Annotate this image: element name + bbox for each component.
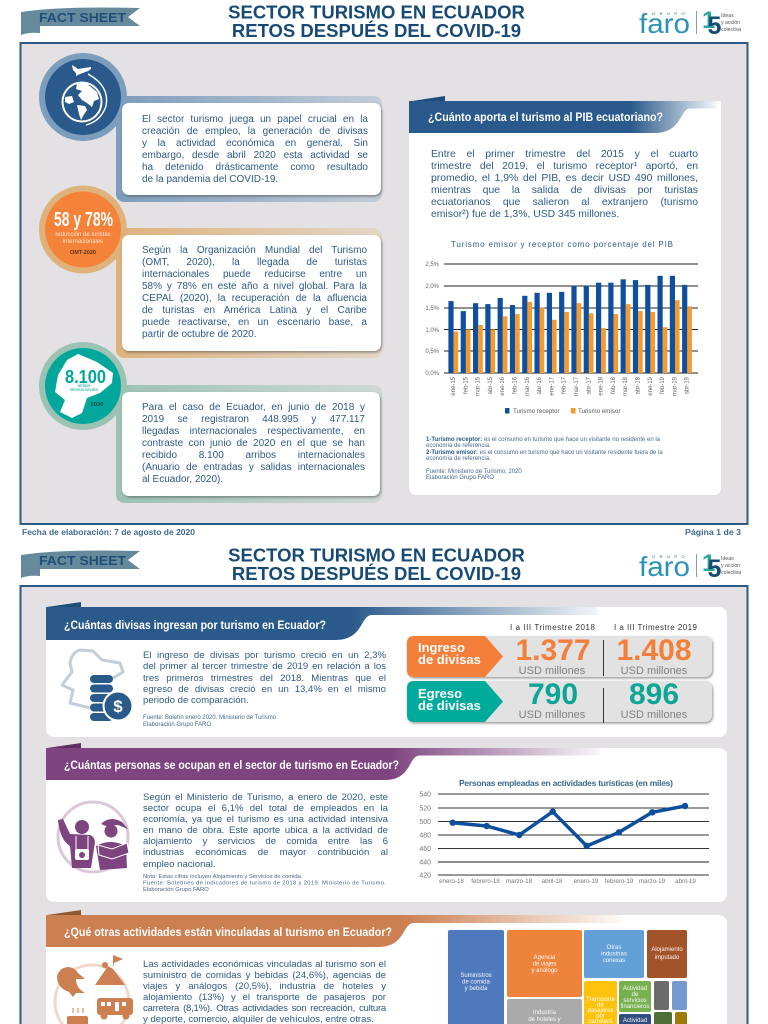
card background bbox=[409, 101, 721, 495]
logo: grupo faro: y acción bbox=[721, 20, 740, 26]
treemap: linked activities: servicios bbox=[623, 998, 647, 1004]
bar chart: tourism share of GDP: 1,5% bbox=[425, 306, 440, 312]
bar chart: tourism share of GDP: 1,0% bbox=[425, 328, 440, 334]
treemap: linked activities: Agencia bbox=[534, 955, 556, 961]
heading: currency: ¿Cuántas divisas ingresan por turismo en Ecuador? bbox=[64, 618, 326, 632]
line chart: employment: marzo-18 bbox=[506, 878, 533, 885]
bar chart: tourism share of GDP: ene-16 bbox=[500, 376, 506, 396]
column headers bbox=[510, 623, 698, 632]
panel: page 2 background bbox=[20, 586, 748, 1024]
bar chart: tourism share of GDP: 0,0% bbox=[425, 371, 440, 377]
line chart: employment: 480 bbox=[419, 832, 431, 840]
band: blue connector bbox=[116, 96, 382, 202]
panel: linked activities bbox=[46, 910, 727, 1024]
bar chart: tourism share of GDP: feb-16 bbox=[512, 376, 518, 394]
badge: 58 y 78%: internacionales bbox=[63, 239, 103, 245]
text: currency: periodo de comparación. bbox=[143, 695, 249, 706]
logo: grupo faro: GRUPO bbox=[652, 554, 689, 559]
treemap: linked activities: por bbox=[596, 1014, 605, 1020]
text: overview: creación de empleo, la generación de divisas bbox=[142, 126, 368, 137]
notes: definitions and source: economía de referencia. bbox=[426, 443, 491, 449]
section: third item, Ecuador arrivals bbox=[39, 342, 382, 503]
logo: grupo faro bbox=[639, 550, 741, 583]
text: GDP intro: Entre el primer trimestre del 2015 y el cuarto bbox=[431, 149, 698, 160]
treemap: linked activities: Industria bbox=[533, 1010, 557, 1016]
text: global reduction: puede reactivarse, en un escenario base, a bbox=[142, 317, 367, 328]
line chart: employment: abril-19 bbox=[675, 878, 696, 885]
section: first item, sector overview bbox=[39, 53, 382, 202]
footer: page number: Página 1 de 3 bbox=[685, 528, 742, 537]
bar chart: tourism share of GDP: abr-15 bbox=[488, 376, 494, 394]
heading: employment: ¿Cuántas personas se ocupan en el sector de turismo en Ecuador? bbox=[64, 758, 399, 772]
notes: definitions and source bbox=[426, 437, 663, 481]
text: global reduction: (OMT, 2020), la llegada de turistas bbox=[142, 257, 367, 268]
text: currency: egreso de divisas creció en un 13,4% en el mismo bbox=[143, 684, 386, 695]
title: SECTOR TURISMO EN ECUADOR bbox=[228, 2, 525, 22]
stat row: egreso de divisas bbox=[407, 678, 712, 723]
stat row: ingreso de divisas: Ingreso bbox=[418, 640, 465, 655]
line chart: employment: 440 bbox=[419, 860, 431, 866]
stat row: ingreso de divisas: de divisas bbox=[418, 652, 481, 667]
bar chart: tourism share of GDP: 2,0% bbox=[425, 284, 440, 290]
text: employment: sector ocupa el 6,1% del total de empleados en la bbox=[143, 803, 388, 814]
text: currency bbox=[143, 650, 386, 710]
title bbox=[228, 2, 525, 41]
badge: 8.100 arribos bbox=[39, 342, 127, 430]
text: Ecuador arrivals: al Ecuador, 2020). bbox=[142, 474, 223, 485]
text: Ecuador arrivals bbox=[142, 402, 365, 490]
bar chart: tourism share of GDP: abr-19 bbox=[685, 376, 691, 394]
text: overview: El sector turismo juega un papel crucial en la bbox=[142, 114, 368, 125]
heading: activities: ¿Qué otras actividades están vinculadas al turismo en Ecuador? bbox=[64, 925, 392, 939]
text: overview: de la pandemia del COVID-19. bbox=[142, 174, 278, 185]
notes: definitions and source: economía de referencia. bbox=[426, 456, 491, 462]
stat row: egreso de divisas: 896 bbox=[629, 678, 679, 711]
text: overview: ha detenido drásticamente como resultado bbox=[142, 162, 368, 173]
text: GDP intro: mientras que la salida de divisas por turistas bbox=[431, 185, 698, 196]
band: green connector bbox=[116, 385, 382, 503]
treemap: linked activities: industrias bbox=[601, 952, 627, 958]
bar chart: tourism share of GDP: mar-16 bbox=[525, 376, 531, 396]
badge: 58 y 78%: 58 y 78% bbox=[54, 209, 113, 231]
treemap: linked activities: de viajes bbox=[533, 962, 556, 968]
treemap: linked activities: de bbox=[597, 1002, 604, 1008]
heading: GDP bbox=[409, 96, 717, 133]
badge: 8.100 arribos: 2020 bbox=[91, 402, 103, 408]
title bbox=[228, 544, 525, 584]
chart title: bars: Turismo emisor y receptor como porcentaje del PIB bbox=[451, 240, 673, 249]
line chart: employment bbox=[419, 792, 709, 885]
text: global reduction bbox=[142, 245, 367, 345]
chart title: line: Personas empleadas en actividades turísticas (en miles) bbox=[459, 778, 673, 788]
stat row: egreso de divisas: 790 bbox=[528, 678, 578, 711]
bar chart: tourism share of GDP: ene-17 bbox=[549, 376, 555, 396]
treemap: linked activities: pasajeros bbox=[587, 1008, 614, 1014]
text: GDP intro bbox=[431, 149, 698, 225]
card: Ecuador arrivals bbox=[122, 392, 380, 496]
notes: employment bbox=[143, 874, 386, 893]
bar chart: tourism share of GDP bbox=[425, 262, 698, 415]
bar chart: tourism share of GDP: ene-19 bbox=[648, 376, 654, 396]
treemap: linked activities: imputado bbox=[655, 955, 680, 961]
ribbon: fact sheet bbox=[21, 550, 140, 578]
panel: foreign currency bbox=[46, 602, 727, 737]
ribbon: fact sheet: FACT SHEET bbox=[39, 553, 126, 568]
text: currency: del primer al tercer trimestre de 2019 en relación a los bbox=[143, 661, 386, 672]
bar chart: tourism share of GDP: abr-17 bbox=[586, 376, 592, 394]
text: GDP intro: emisor²) fue de 1,3%, USD 345 millones. bbox=[431, 209, 619, 220]
stat row: egreso de divisas: USD millones bbox=[519, 709, 586, 721]
panel: employment bbox=[46, 743, 727, 902]
header: page 1 bbox=[21, 2, 741, 41]
bar chart: tourism share of GDP: ene-18 bbox=[599, 376, 605, 396]
text: employment: economía, ya que el turismo es una actividad intensiva bbox=[143, 814, 388, 825]
text: activities: viajes y análogos (20,5%), industria de hoteles y bbox=[143, 981, 386, 992]
text: employment: alojamiento y servicios de comida entre las 6 bbox=[143, 836, 388, 847]
logo: grupo faro: 1 bbox=[702, 7, 715, 34]
text: currency: El ingreso de divisas por turismo creció en un 2,3% bbox=[143, 650, 386, 661]
text: Ecuador arrivals: Para el caso de Ecuador, en junio de 2018 y bbox=[142, 402, 365, 413]
bar chart: tourism share of GDP: feb-18 bbox=[611, 376, 617, 394]
text: global reduction: partir de octubre de 2020. bbox=[142, 329, 257, 340]
section: second item, global reduction bbox=[39, 186, 382, 358]
logo: grupo faro: faro bbox=[639, 8, 690, 39]
logo: grupo faro: GRUPO bbox=[652, 11, 689, 16]
card background bbox=[46, 607, 727, 737]
text: overview: y la actividad económica en general. Sin bbox=[142, 138, 368, 149]
notes: employment: Elaboración Grupo FARO bbox=[143, 887, 209, 893]
notes: employment: Nota: Estas cifras incluyen Alojamiento y Servicios de comida. bbox=[143, 874, 303, 880]
bar chart: tourism share of GDP: mar-15 bbox=[476, 376, 482, 396]
source: currency: Elaboración Grupo FARO bbox=[143, 722, 211, 728]
notes: employment: Fuente: Boletines de indicadores de turismo de 2018 y 2019. Ministerio de Turismo. bbox=[143, 880, 386, 886]
stat row: ingreso de divisas: USD millones bbox=[519, 665, 586, 677]
title: RETOS DESPUÉS DEL COVID-19 bbox=[232, 563, 521, 584]
treemap: linked activities: Otras bbox=[607, 945, 621, 951]
treemap: linked activities: conexas bbox=[603, 958, 625, 964]
bar chart: tourism share of GDP: ene-15 bbox=[451, 376, 457, 396]
stat row: ingreso de divisas: USD millones bbox=[621, 665, 688, 677]
badge: 8.100 arribos: arribos bbox=[78, 383, 90, 388]
logo: grupo faro: y acción bbox=[721, 563, 740, 569]
column headers: I a III Trimestre 2018 bbox=[510, 623, 596, 632]
bar chart: tourism share of GDP: mar-19 bbox=[672, 376, 678, 396]
icon: tourism activities bbox=[55, 955, 133, 1024]
logo: grupo faro: faro bbox=[639, 551, 690, 582]
text: employment bbox=[143, 792, 388, 872]
ribbon: fact sheet bbox=[21, 8, 140, 35]
treemap: linked activities: Alojamiento bbox=[651, 947, 683, 953]
logo: grupo faro: 1 bbox=[702, 550, 715, 577]
bar chart: tourism share of GDP: mar-18 bbox=[623, 376, 629, 396]
text: GDP intro: promedio, el 1,9% del PIB, es decir USD 490 millones, bbox=[431, 173, 698, 184]
treemap: linked activities: Transporte bbox=[586, 997, 616, 1003]
text: Ecuador arrivals: recibido 8.100 arribos internacionales bbox=[142, 450, 365, 461]
treemap: linked activities: Actividad bbox=[623, 1018, 647, 1024]
panel: contribution to GDP bbox=[409, 96, 721, 495]
band: tan connector bbox=[116, 228, 382, 358]
line chart: employment: abril-18 bbox=[542, 878, 563, 885]
badge: 58 y 78% bbox=[39, 186, 127, 274]
text: activities: carretera (8,1%). Otras actividades son recreación, cultura bbox=[143, 1003, 386, 1014]
source: currency: Fuente: Boletín enero 2020. Ministerio de Turismo bbox=[143, 715, 277, 721]
card: global reduction bbox=[122, 235, 381, 351]
stat row: ingreso de divisas bbox=[407, 634, 712, 677]
text: activities: suministro de comidas y bebidas (24,6%), agencias de bbox=[143, 970, 386, 981]
text: global reduction: de turistas en América Latina y el Caribe bbox=[142, 305, 367, 316]
text: global reduction: internacionales puede reducirse entre un bbox=[142, 269, 367, 280]
line chart: employment: 460 bbox=[419, 846, 431, 853]
logo: grupo faro: colectiva bbox=[721, 27, 741, 33]
line chart: employment: 420 bbox=[419, 872, 431, 880]
treemap: linked activities: de comida bbox=[462, 980, 491, 986]
text: activities bbox=[143, 960, 386, 1024]
stat row: egreso de divisas: USD millones bbox=[621, 709, 688, 721]
icon: map and coins: $ bbox=[113, 697, 123, 716]
bar chart: tourism share of GDP: abr-16 bbox=[537, 376, 543, 394]
text: overview bbox=[142, 114, 368, 190]
heading: currency bbox=[46, 602, 598, 640]
text: activities: alojamiento (13%) y el transporte de pasajeros por bbox=[143, 992, 386, 1003]
line chart: employment: marzo-19 bbox=[639, 878, 666, 885]
notes: definitions and source: 1-Turismo receptor: es el consumo en turismo que hace un visitante no residente en la bbox=[426, 437, 661, 443]
text: Ecuador arrivals: llegadas internacionales respectivamente, en bbox=[142, 426, 365, 437]
stat row: egreso de divisas: de divisas bbox=[418, 698, 481, 713]
text: employment: en mano de obra. Este aporte ubica a la actividad de bbox=[143, 825, 388, 836]
badge: 58 y 78%: reducción de turistas bbox=[55, 232, 111, 238]
text: employment: industrias económicas de mayor contribución al bbox=[143, 847, 388, 858]
treemap: linked activities: financieros bbox=[620, 1004, 650, 1010]
icon: map and coins bbox=[62, 650, 134, 722]
card background bbox=[46, 915, 727, 1024]
heading: GDP: ¿Cuánto aporta el turismo al PIB ecuatoriano? bbox=[428, 110, 663, 124]
treemap: linked activities: de hoteles y bbox=[528, 1017, 561, 1023]
line chart: employment: 520 bbox=[419, 806, 431, 812]
legend: Turismo emisor bbox=[578, 408, 620, 415]
title: SECTOR TURISMO EN ECUADOR bbox=[228, 544, 525, 566]
text: global reduction: CEPAL (2020), la recuperación de la afluencia bbox=[142, 293, 367, 304]
heading: activities bbox=[46, 910, 620, 947]
bar chart: tourism share of GDP: abr-18 bbox=[636, 376, 642, 394]
logo: grupo faro bbox=[639, 7, 741, 40]
badge: 8.100 arribos: 8.100 bbox=[65, 367, 106, 387]
line chart: employment: enero-18 bbox=[439, 878, 464, 885]
notes: definitions and source: 2-Turismo emisor: es el consumo en turismo que hace un visitante residente fuera de la bbox=[426, 450, 663, 456]
treemap: linked activities: y análogo bbox=[531, 968, 558, 974]
treemap: linked activities: de bbox=[632, 992, 639, 998]
legend: Turismo receptor bbox=[513, 408, 560, 415]
treemap: linked activities: Actividad bbox=[623, 986, 647, 992]
logo: grupo faro: 5 bbox=[708, 12, 722, 40]
notes: definitions and source: Elaboración Grupo FARO bbox=[426, 475, 494, 481]
bar chart: tourism share of GDP: feb-15 bbox=[463, 376, 469, 394]
stat row: egreso de divisas: Egreso bbox=[418, 686, 462, 701]
text: Ecuador arrivals: contraste con junio de 2020 en el que se han bbox=[142, 438, 365, 449]
icon: globe and plane bbox=[39, 53, 127, 141]
text: GDP intro: trimestre del 2019, el turismo receptor¹ aportó, en bbox=[431, 161, 698, 172]
icon: tourists bbox=[58, 802, 129, 872]
stat row: ingreso de divisas: 1.408 bbox=[616, 634, 692, 667]
text: currency: tres primeros trimestres del 2018. Mientras que el bbox=[143, 673, 386, 684]
text: Ecuador arrivals: 2019 se registraron 448.995 y 477.117 bbox=[142, 414, 365, 425]
badge: 8.100 arribos: internacionales bbox=[70, 387, 98, 392]
text: employment: Según el Ministerio de Turismo, a enero de 2020, este bbox=[143, 792, 388, 803]
badge: 58 y 78%: OMT-2020 bbox=[70, 250, 96, 256]
card: overview bbox=[122, 103, 381, 195]
logo: grupo faro: Ideas bbox=[721, 556, 734, 562]
treemap: linked activities: Suministros bbox=[460, 973, 492, 979]
header: page 2 bbox=[21, 544, 741, 584]
text: global reduction: Según la Organización Mundial del Turismo bbox=[142, 245, 367, 256]
text: employment: empleo nacional. bbox=[143, 859, 216, 870]
treemap: linked activities: y bebida bbox=[465, 986, 488, 992]
line chart: employment: 540 bbox=[419, 792, 431, 798]
column headers: I a III Trimestre 2019 bbox=[614, 623, 698, 632]
line chart: employment: febrero-18 bbox=[471, 878, 500, 885]
ribbon: fact sheet: FACT SHEET bbox=[39, 10, 126, 25]
logo: grupo faro: Ideas bbox=[721, 13, 734, 19]
text: global reduction: 58% y 78% en este año a nivel global. Para la bbox=[142, 281, 367, 292]
text: Ecuador arrivals: (Anuario de entradas y salidas internacionales bbox=[142, 462, 365, 473]
treemap: linked activities bbox=[448, 930, 687, 1024]
line chart: employment: febrero-19 bbox=[605, 878, 634, 885]
bar chart: tourism share of GDP: 2,5% bbox=[425, 262, 440, 268]
legend bbox=[505, 408, 620, 415]
bar chart: tourism share of GDP: feb-19 bbox=[660, 376, 666, 394]
card background bbox=[46, 748, 727, 902]
logo: grupo faro: 5 bbox=[708, 555, 722, 583]
bar chart: tourism share of GDP: mar-17 bbox=[574, 376, 580, 396]
text: GDP intro: ecuatorianos que salieron al extranjero (turismo bbox=[431, 197, 698, 208]
source: currency bbox=[143, 715, 277, 728]
panel: page 1 background bbox=[20, 43, 748, 524]
bar chart: tourism share of GDP: 0,5% bbox=[425, 349, 440, 355]
text: overview: embargo, desde abril 2020 esta actividad se bbox=[142, 150, 368, 161]
notes: definitions and source: Fuente: Ministerio de Turismo, 2020 bbox=[426, 469, 522, 475]
line chart: employment: enero-19 bbox=[574, 878, 599, 885]
logo: grupo faro: colectiva bbox=[721, 570, 741, 576]
heading: employment bbox=[46, 743, 600, 780]
bar chart: tourism share of GDP: feb-17 bbox=[562, 376, 568, 394]
footer: date: Fecha de elaboración: 7 de agosto de 2020 bbox=[22, 528, 196, 537]
title: RETOS DESPUÉS DEL COVID-19 bbox=[232, 20, 521, 41]
stat row: ingreso de divisas: 1.377 bbox=[515, 634, 591, 667]
line chart: employment: 500 bbox=[419, 819, 431, 826]
